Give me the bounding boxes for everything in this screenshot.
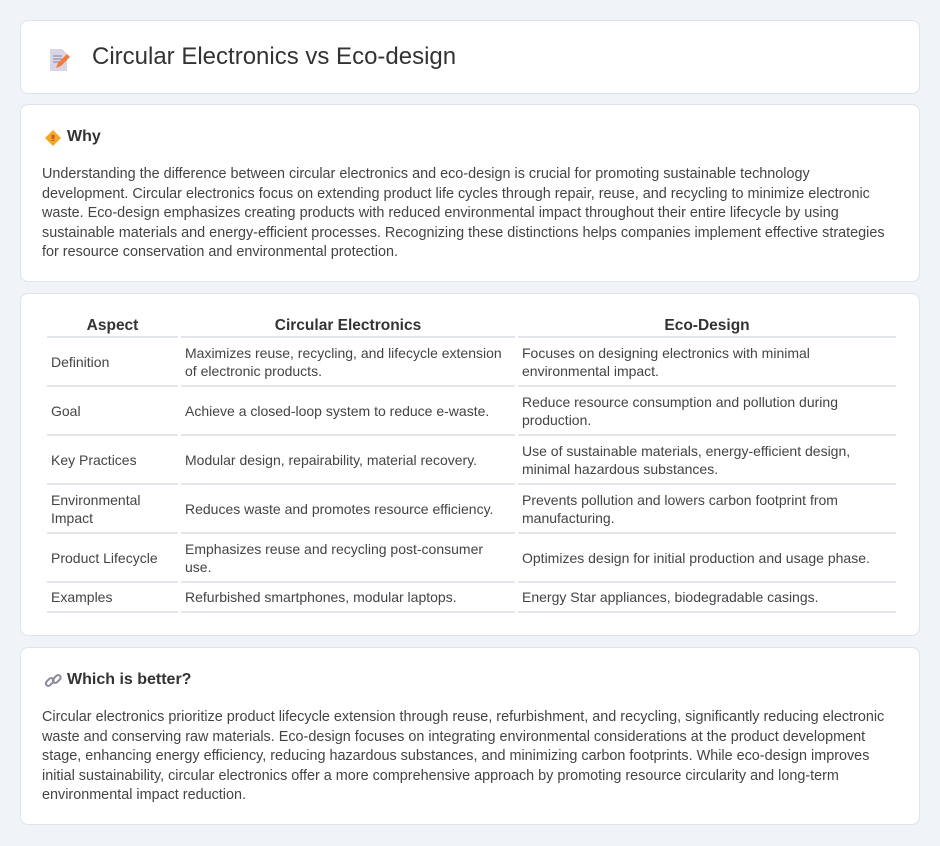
- table: Modular design, repairability, material recovery.: [185, 452, 477, 468]
- table: Use of sustainable materials, energy-efficient design, minimal hazardous substances.: [522, 442, 850, 476]
- table: Environmental Impact: [51, 492, 140, 526]
- heading: why: Why: [67, 128, 101, 145]
- panel: why: [20, 104, 920, 282]
- table: Emphasizes reuse and recycling post-consumer use.: [185, 540, 483, 574]
- heading: which is better: Which is better?: [67, 671, 191, 688]
- table: Optimizes design for initial production and usage phase.: [522, 550, 870, 566]
- table: Maximizes reuse, recycling, and lifecycle extension of electronic products.: [185, 344, 502, 378]
- table: [47, 316, 896, 613]
- panel: title: [20, 20, 920, 94]
- table: Eco-Design: [664, 316, 750, 334]
- table: Aspect: [87, 316, 138, 334]
- table: Achieve a closed-loop system to reduce e-waste.: [185, 402, 489, 418]
- table: Reduce resource consumption and pollution during production.: [522, 394, 838, 428]
- table: Circular Electronics: [275, 316, 421, 334]
- icon: link: [44, 674, 62, 687]
- table: Key Practices: [51, 452, 137, 468]
- table: Definition: [51, 354, 109, 370]
- table: Reduces waste and promotes resource efficiency.: [185, 500, 493, 516]
- panel: comparison table: [20, 293, 920, 636]
- title: Circular Electronics vs Eco-design: [92, 43, 456, 70]
- table: Focuses on designing electronics with minimal environmental impact.: [522, 344, 810, 378]
- text: why: Understanding the difference between circular electronics and eco-design is crucial for promoting sustainable technology development. Circular electronics focus on extending product life cycles through repair, reuse, and recycling to minimize electronic waste. Eco-design emphasizes creating products with reduced environmental impact throughout their entire lifecycle by using sustainable materials and energy-efficient processes. Recognizing these distinctions helps companies implement effective strategies for resource conservation and environmental protection.: [42, 166, 885, 260]
- table: Examples: [51, 589, 112, 605]
- panel: which is better: [20, 647, 920, 825]
- icon: diamond: [45, 130, 61, 146]
- table: Energy Star appliances, biodegradable casings.: [522, 589, 819, 605]
- icon: document pencil: [50, 49, 70, 71]
- icon: diamond: ‼: [51, 134, 55, 143]
- table: Refurbished smartphones, modular laptops.: [185, 589, 457, 605]
- table: Prevents pollution and lowers carbon footprint from manufacturing.: [522, 492, 838, 526]
- table: Product Lifecycle: [51, 550, 158, 566]
- text: which is better: Circular electronics prioritize product lifecycle extension through reuse, refurbishment, and recycling, significantly reducing electronic waste and conserving raw materials. Eco-design focuses on integrating environmental considerations at the product development stage, enhancing energy efficiency, reducing hazardous substances, and minimizing carbon footprints. While eco-design improves initial sustainability, circular electronics offer a more comprehensive approach by promoting resource circularity and long-term environmental impact reduction.: [42, 709, 884, 803]
- table: Goal: [51, 402, 81, 418]
